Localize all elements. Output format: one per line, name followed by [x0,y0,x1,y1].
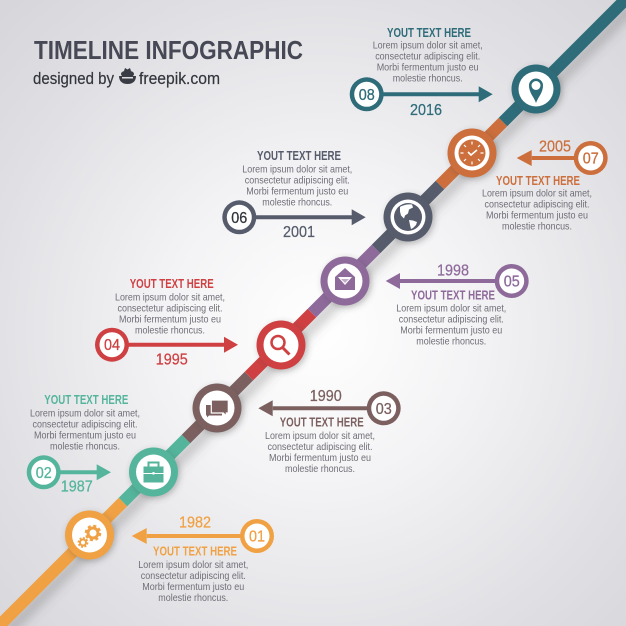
milestone 01 [132,515,274,604]
node 03: chat [192,384,244,435]
arrow 07 [517,150,582,166]
heading 06: YOUT TEXT HERE [257,148,341,163]
body 07 [482,188,592,233]
year 1982: 1982 [179,515,211,532]
badge 08 [350,77,384,111]
body 06: consectetur adipiscing elit. [245,174,350,186]
heading 03: YOUT TEXT HERE [280,415,364,430]
body 08: molestie rhoncus. [393,73,463,85]
arrow 08 [379,86,493,102]
node 02: briefcase [129,448,180,499]
badge 04: 04 [104,337,120,354]
body 02: consectetur adipiscing elit. [32,418,138,430]
year 2016: 2016 [410,102,442,119]
body 06: Lorem ipsum dolor sit amet, [242,163,352,175]
badge 06: 06 [231,210,247,227]
arrow 03 [258,400,373,416]
body 05: consectetur adipiscing elit. [399,314,504,326]
body 02: Lorem ipsum dolor sit amet, [30,407,140,419]
badge 03 [367,391,401,425]
year 2001: 2001 [283,224,315,241]
body 03: Morbi fermentum justo eu [269,452,371,464]
node 04: magnifier [256,320,308,372]
body 01: molestie rhoncus. [158,592,228,604]
year 2005: 2005 [539,139,571,156]
heading 05: YOUT TEXT HERE [411,287,495,302]
credit site: freepik.com [139,70,220,88]
body 08 [373,40,483,85]
title block [33,35,303,88]
arrow 02 [55,464,111,480]
arrow 04 [125,337,238,353]
node 01: gears [65,510,116,562]
body 03: molestie rhoncus. [285,463,355,475]
badge 02: 02 [36,465,52,482]
node 05: envelope [320,256,372,308]
body 03: consectetur adipiscing elit. [268,441,372,453]
body 06: molestie rhoncus. [262,196,332,208]
node 07: clock [448,128,499,180]
body 01: consectetur adipiscing elit. [141,570,246,582]
node 08: pin [512,64,563,116]
year 1998: 1998 [437,263,469,280]
milestone 06 [222,148,366,241]
body 02: molestie rhoncus. [50,440,120,452]
heading 02: YOUT TEXT HERE [44,392,129,407]
body 05: Lorem ipsum dolor sit amet, [396,303,506,315]
badge 01: 01 [249,528,265,546]
body 06 [242,163,352,208]
body 01: Morbi fermentum justo eu [142,581,244,593]
milestone 07 [482,139,608,233]
icon: magnifier [272,336,290,354]
badge 08: 08 [359,87,375,104]
icon: envelope [335,268,355,290]
body 08: consectetur adipiscing elit. [375,51,480,63]
icon: globe [394,203,422,231]
badge 01 [240,519,274,553]
body 03 [265,430,375,475]
body 07: consectetur adipiscing elit. [484,199,590,211]
body 05: molestie rhoncus. [416,336,486,348]
body 07: molestie rhoncus. [502,221,572,233]
icon: chat bubbles [206,400,228,418]
body 03: Lorem ipsum dolor sit amet, [265,430,375,442]
icon: briefcase [144,462,164,482]
body 04: molestie rhoncus. [135,325,205,337]
title: TIMELINE INFOGRAPHIC [34,35,303,65]
badge 06 [222,200,256,234]
badge 03: 03 [376,401,392,418]
icon: freepik logo [119,68,136,84]
milestone 02 [27,392,140,496]
body 01 [138,559,248,604]
node 06: globe [384,192,435,244]
body 05: Morbi fermentum justo eu [400,325,502,337]
body 04: Lorem ipsum dolor sit amet, [115,292,225,304]
icon: map pin [529,78,543,103]
badge 05 [495,264,529,298]
arrow 05 [386,273,500,289]
body 07: Morbi fermentum justo eu [486,210,588,222]
badge 05: 05 [504,274,520,290]
arrow 01 [132,528,247,544]
body 01: Lorem ipsum dolor sit amet, [138,559,248,571]
body 04: consectetur adipiscing elit. [118,303,222,315]
milestone 08 [350,25,493,119]
body 04: Morbi fermentum justo eu [119,314,221,326]
icon: gears [78,526,100,547]
milestone 03 [258,388,401,475]
heading 01: YOUT TEXT HERE [153,544,237,559]
body 08: Lorem ipsum dolor sit amet, [373,40,483,52]
body 02: Morbi fermentum justo eu [34,429,136,441]
milestone 04 [95,276,238,369]
badge 07: 07 [583,150,599,168]
year 1990: 1990 [310,388,342,405]
badge 04 [95,328,129,362]
heading 08: YOUT TEXT HERE [387,25,471,40]
icon: clock [458,140,486,166]
year 1995: 1995 [156,352,188,369]
body 08: Morbi fermentum justo eu [377,62,479,74]
body 05 [396,303,506,348]
body 07: Lorem ipsum dolor sit amet, [482,188,592,200]
milestone 05 [386,263,529,348]
heading 04: YOUT TEXT HERE [130,276,214,291]
credit line: designed by [33,70,115,88]
body 02 [30,407,140,452]
arrow 06 [252,209,366,225]
year 1987: 1987 [61,479,93,496]
body 04 [115,292,225,337]
heading 07: YOUT TEXT HERE [496,173,580,188]
body 06: Morbi fermentum justo eu [246,185,348,197]
